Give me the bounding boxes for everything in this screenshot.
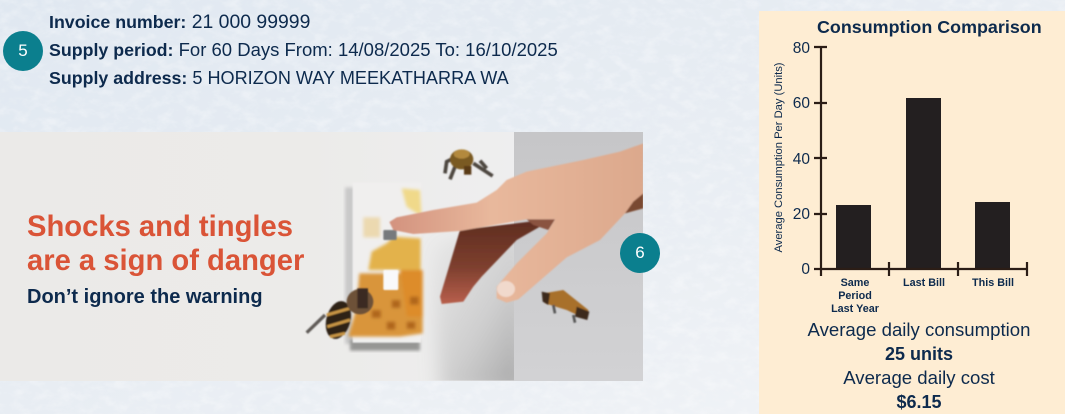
bar chart: 60: [793, 95, 810, 112]
artwork drawn in zoomed coordinates: [307, 143, 643, 393]
bar chart: Same: [841, 277, 869, 289]
heading: [27, 211, 304, 277]
heading: are a sign of danger: [27, 245, 304, 277]
middle finger: [440, 222, 540, 304]
badge 6: [620, 233, 660, 273]
bar chart: Last Year: [831, 303, 880, 315]
invoice details: Invoice number: 21 000 99999: [49, 11, 310, 33]
hand and index finger: [389, 143, 643, 303]
daily consumption and cost summary: $6.15: [896, 392, 942, 412]
right bee: [542, 290, 589, 323]
panel: consumption comparison: [759, 11, 1065, 414]
invoice details: Supply address: 5 HORIZON WAY MEEKATHARRA WA: [49, 68, 509, 88]
bar chart: Last Bill: [903, 277, 945, 289]
badge 6: 6: [635, 243, 645, 262]
daily consumption and cost summary: [808, 319, 1030, 412]
switch toggles: [383, 270, 398, 290]
invoice details: [49, 11, 558, 88]
chart title: Consumption Comparison: [817, 17, 1042, 37]
bar chart: Period: [838, 290, 872, 302]
subheading: Don’t ignore the warning: [27, 286, 263, 308]
bar chart: 80: [793, 40, 810, 57]
bar chart: 20: [793, 206, 810, 223]
bar chart: 0: [801, 261, 810, 278]
daily consumption and cost summary: Average daily consumption: [808, 319, 1030, 340]
honeycomb: [348, 188, 423, 337]
switch plate: [345, 187, 355, 344]
top bee: [445, 149, 493, 179]
daily consumption and cost summary: Average daily cost: [843, 367, 995, 388]
bar chart: This Bill: [972, 277, 1014, 289]
left bee: [307, 288, 373, 342]
bar chart: Average Consumption Per Day (Units): [773, 62, 785, 253]
bar chart: [773, 40, 1028, 315]
daily consumption and cost summary: 25 units: [885, 344, 953, 364]
badge 5: [3, 31, 43, 71]
heading: Shocks and tingles: [27, 211, 293, 243]
bar chart: 40: [793, 151, 810, 168]
artwork softened to match the low-resolution photo: [307, 143, 643, 342]
photo: hand reaching for a light switch with bees: [0, 132, 643, 381]
cast shadow on wall: [432, 242, 514, 381]
invoice details: Supply period: For 60 Days From: 14/08/2025 To: 16/10/2025: [49, 39, 558, 60]
badge 5: 5: [18, 41, 28, 60]
